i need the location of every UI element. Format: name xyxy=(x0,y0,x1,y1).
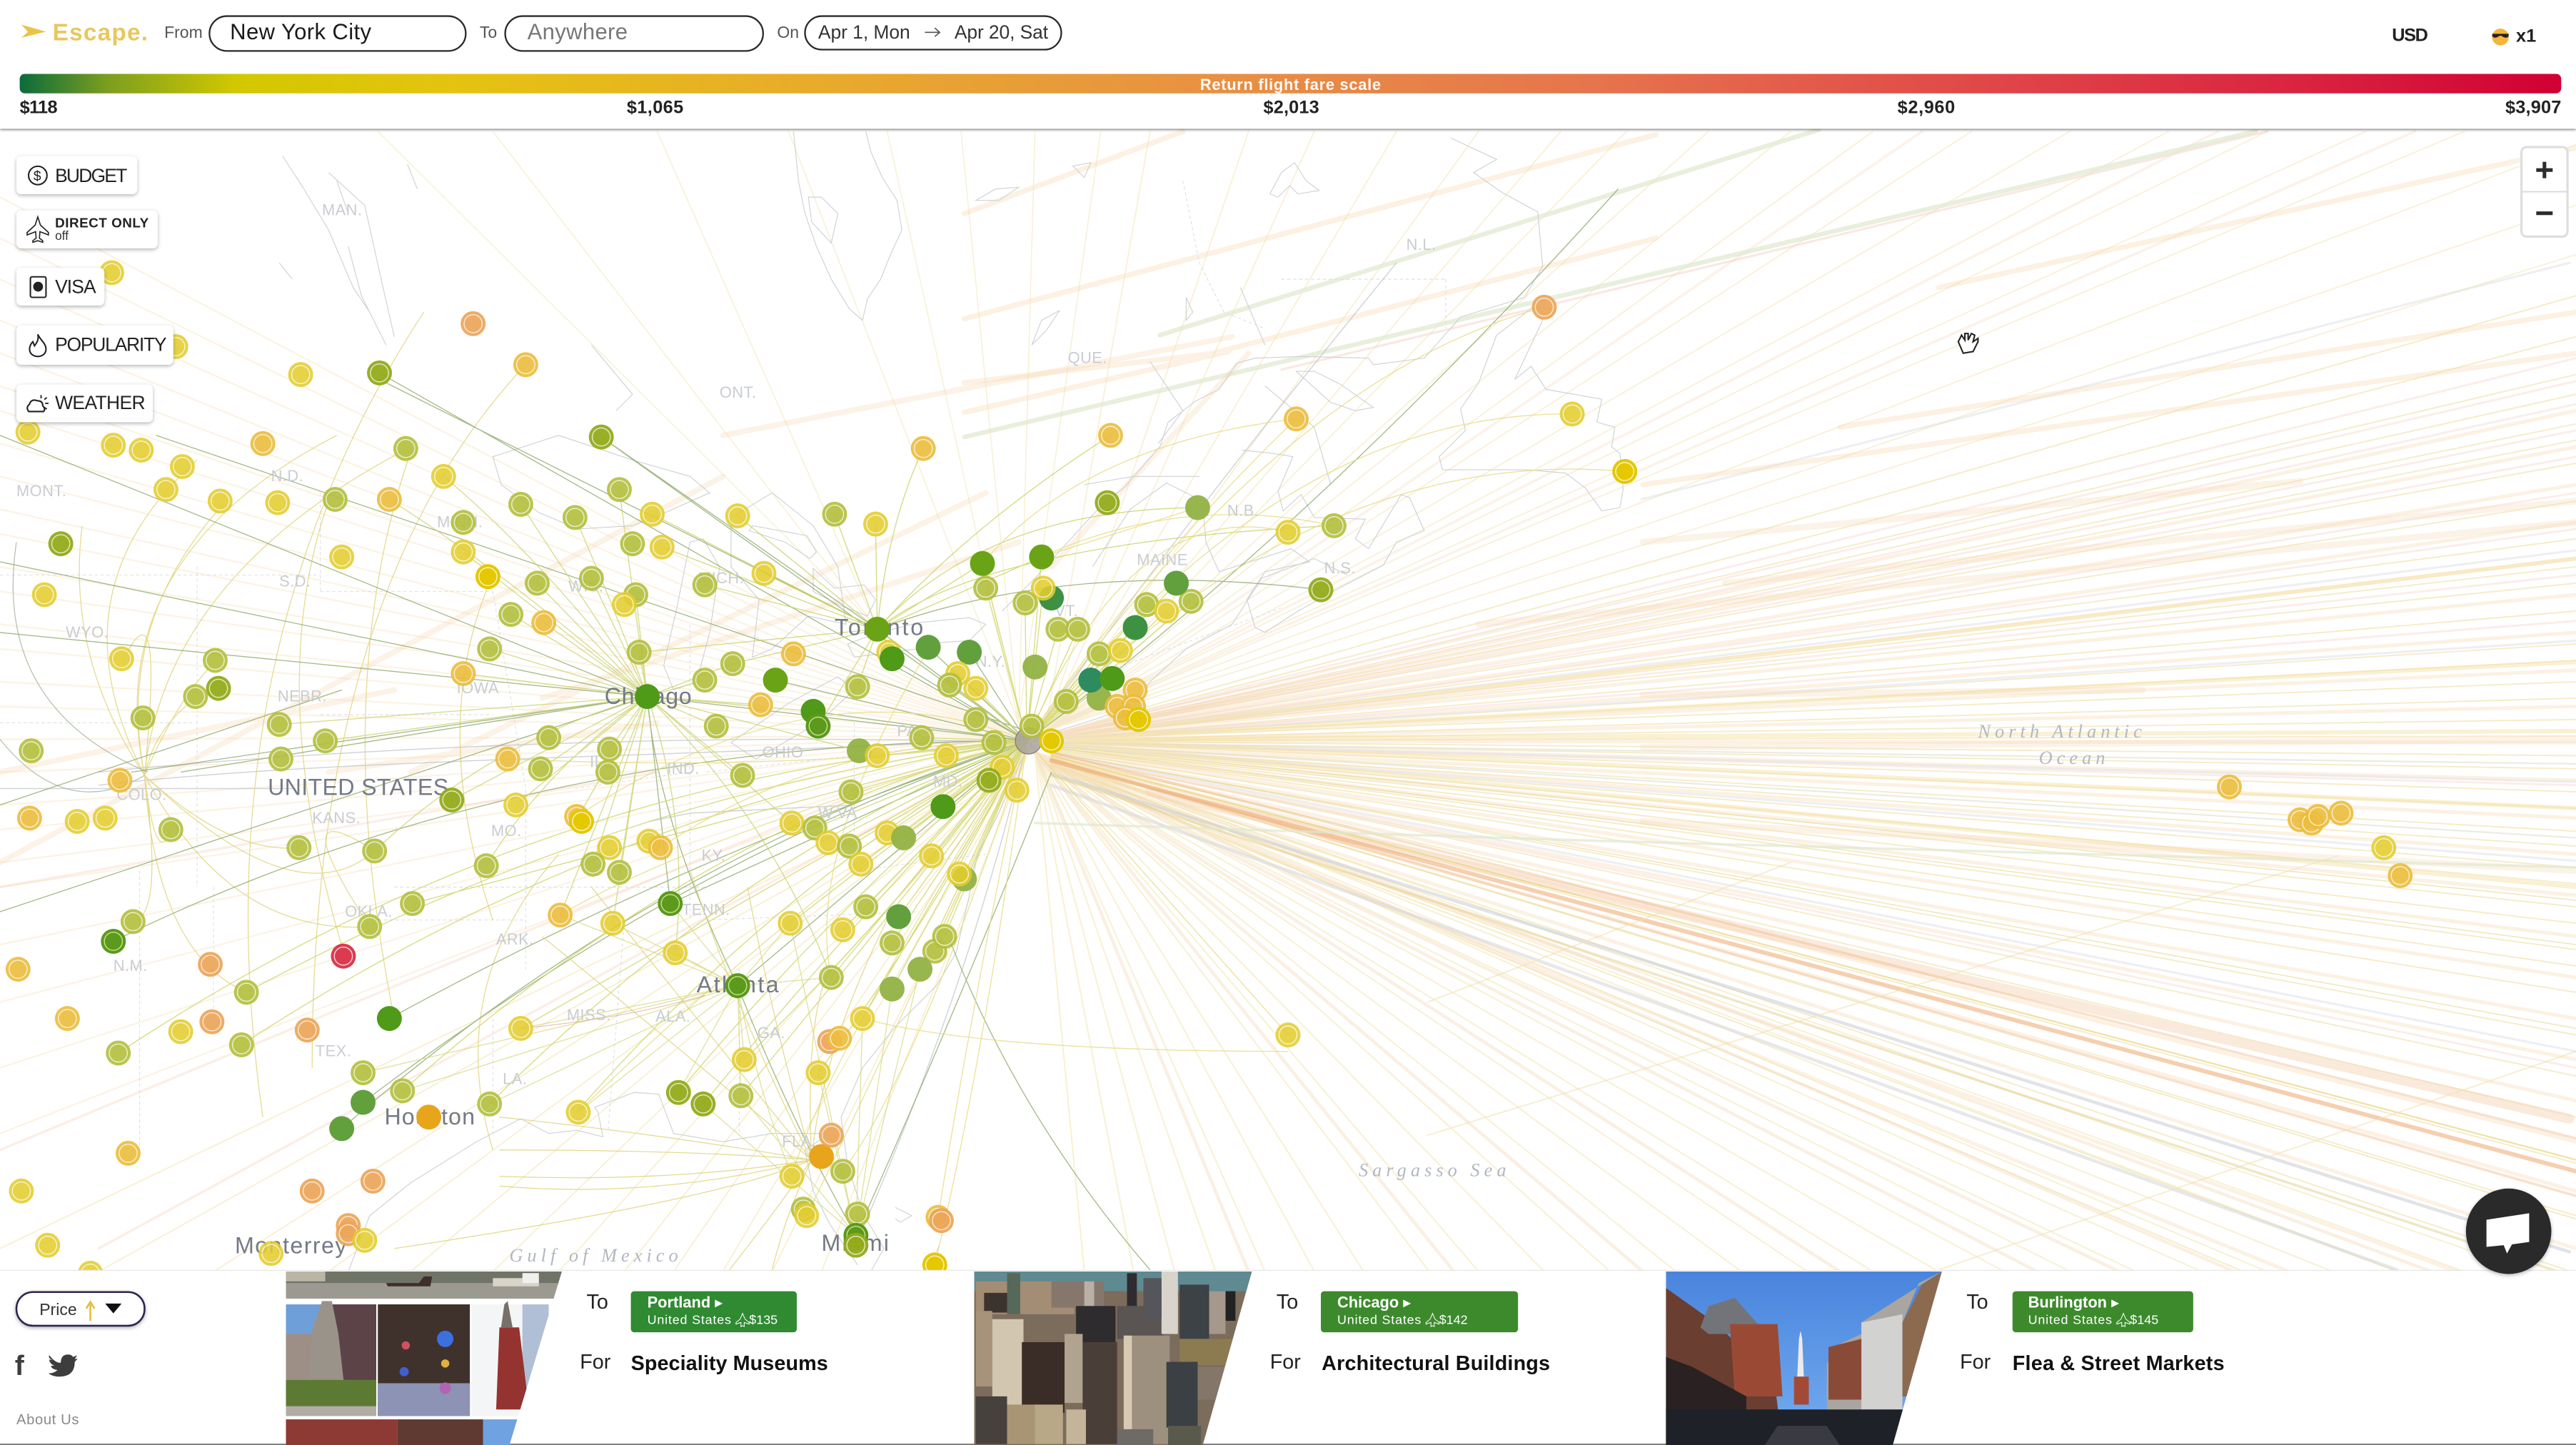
card: Chicago: Architectural Buildings xyxy=(1322,1352,1550,1375)
card: Burlington: Flea & Street Markets xyxy=(2013,1352,2225,1375)
date field xyxy=(777,16,1061,50)
currency: USD xyxy=(2392,26,2428,46)
state, province and sea labels: PA. xyxy=(897,722,922,740)
state, province and sea labels: MICH. xyxy=(698,569,744,587)
state, province and sea labels: LA. xyxy=(503,1070,527,1088)
filter button: budget: $ xyxy=(34,168,41,184)
state, province and sea labels: N.L. xyxy=(1407,236,1437,253)
state, province and sea labels: MD. xyxy=(933,772,962,790)
filter button: visa xyxy=(16,268,104,306)
origin marker: New York City xyxy=(1015,727,1042,754)
icon: hand cursor xyxy=(1958,333,1978,353)
to field: Anywhere xyxy=(528,19,628,44)
state, province and sea labels: QUE. xyxy=(1068,349,1107,367)
state, province and sea labels: N.M. xyxy=(114,957,148,975)
from field xyxy=(164,16,466,51)
state, province and sea labels: MAN. xyxy=(322,201,362,218)
state, province and sea labels: N.B. xyxy=(1227,502,1259,520)
from field: From xyxy=(164,23,203,41)
zoom control xyxy=(2522,147,2567,236)
card: Portland: To xyxy=(586,1291,608,1314)
state borders xyxy=(0,181,1446,1150)
destination tag: Chicago: Chicago ▸ xyxy=(1337,1294,1411,1311)
state, province and sea labels: N.Y. xyxy=(976,653,1005,670)
state, province and sea labels: NEBR. xyxy=(278,688,327,705)
card: Burlington: For xyxy=(1960,1351,1991,1374)
state, province and sea labels: Sargasso Sea xyxy=(1359,1159,1511,1181)
card: Portland: Speciality Museums xyxy=(631,1352,828,1375)
long grey routes xyxy=(0,263,1397,1240)
photo: Portland collage xyxy=(286,1272,565,1445)
filter button: direct only: DIRECT ONLY xyxy=(55,216,149,231)
card: Burlington xyxy=(1666,1272,2225,1445)
state, province and sea labels: WIS. xyxy=(568,577,603,595)
card: Portland xyxy=(286,1272,828,1445)
state, province and sea labels: GA. xyxy=(758,1024,785,1042)
destination tag: Portland: Portland ▸ xyxy=(648,1294,723,1311)
filter button: weather xyxy=(16,384,153,422)
date field: Apr 20, Sat xyxy=(955,21,1049,43)
filter button: visa: VISA xyxy=(55,276,96,298)
photo: Chicago skyline xyxy=(975,1272,1254,1445)
card: Chicago: To xyxy=(1277,1291,1298,1314)
state, province and sea labels: COLO. xyxy=(116,786,167,804)
destination price markers xyxy=(6,260,2413,1286)
header bar xyxy=(0,0,2576,129)
destination tag: Burlington: United States xyxy=(2028,1313,2112,1327)
state, province and sea labels: MINN. xyxy=(437,513,483,531)
fare scale bar: $2,013 xyxy=(1263,97,1319,117)
state, province and sea labels: KANS. xyxy=(312,809,361,827)
date field: On xyxy=(777,23,799,41)
state, province and sea labels: N.S. xyxy=(1324,559,1356,577)
city labels: Houston xyxy=(384,1104,475,1129)
city labels: Chicago xyxy=(605,683,692,709)
date field: Apr 1, Mon xyxy=(818,21,910,43)
state, province and sea labels: ILL. xyxy=(590,753,617,771)
state, province and sea labels: North Atlantic xyxy=(1977,720,2146,742)
about link: About Us xyxy=(16,1412,79,1428)
icon: zoom in xyxy=(2536,162,2552,178)
state, province and sea labels: TEX. xyxy=(316,1042,351,1060)
state, province and sea labels: Ocean xyxy=(2039,747,2110,768)
destination tag: Chicago: United States xyxy=(1337,1313,1421,1327)
state, province and sea labels: S.D. xyxy=(279,572,311,590)
to field xyxy=(480,16,763,51)
state, province and sea labels: IOWA xyxy=(457,679,499,697)
destination tag: Chicago xyxy=(1321,1292,1518,1332)
destination tag: Burlington: Burlington ▸ xyxy=(2028,1294,2119,1311)
filter button: weather: WEATHER xyxy=(55,392,146,413)
state, province and sea labels: OHIO xyxy=(763,743,803,761)
sort button xyxy=(16,1292,144,1326)
filter button: budget xyxy=(16,156,137,194)
state, province and sea labels: IND. xyxy=(667,760,700,777)
icon: twitter xyxy=(49,1354,78,1376)
state, province and sea labels: TENN. xyxy=(682,901,730,919)
state, province and sea labels: MONT. xyxy=(16,482,66,500)
city labels: Miami xyxy=(822,1230,889,1256)
logo: Escape. xyxy=(53,19,148,46)
fare scale bar: $3,907 xyxy=(2505,97,2561,117)
state, province and sea labels: Gulf of Mexico xyxy=(509,1244,683,1266)
green and yellow flight routes xyxy=(0,189,1625,1270)
to field: To xyxy=(480,23,497,41)
card: Portland: For xyxy=(580,1351,611,1374)
city labels: Monterrey xyxy=(235,1233,347,1259)
state, province and sea labels: N.D. xyxy=(271,467,303,485)
filter button: direct only: off xyxy=(55,228,69,243)
card: Chicago xyxy=(975,1272,1550,1445)
state, province and sea labels: KY. xyxy=(702,847,725,865)
icon: sunglasses emoji multiplier: x1 xyxy=(2516,26,2536,46)
state, province and sea labels: MO. xyxy=(491,822,522,840)
card: Burlington: To xyxy=(1966,1291,1988,1314)
destination tag: Burlington xyxy=(2013,1292,2193,1332)
filter button: direct only xyxy=(16,211,158,248)
state, province and sea labels: MISS. xyxy=(567,1006,611,1024)
card: Chicago: For xyxy=(1270,1351,1301,1374)
photo: Burlington street xyxy=(1666,1272,1945,1445)
state, province and sea labels xyxy=(16,201,2146,1266)
sort button: Price xyxy=(39,1300,77,1319)
footer bar xyxy=(0,1270,2576,1445)
western arcs from Denver xyxy=(0,312,558,1150)
state, province and sea labels: ONT. xyxy=(720,383,756,401)
filter button: popularity xyxy=(16,326,173,365)
fare scale bar: $2,960 xyxy=(1898,97,1955,117)
city labels: Toronto xyxy=(835,614,923,640)
map coastlines and borders xyxy=(279,131,1623,1272)
state, province and sea labels: ARK. xyxy=(496,930,534,948)
city labels xyxy=(235,614,923,1259)
state, province and sea labels: ALA. xyxy=(655,1007,690,1025)
icon: facebook: f xyxy=(15,1351,25,1381)
state, province and sea labels: VT. xyxy=(1055,602,1078,620)
chat button xyxy=(2466,1189,2551,1274)
destination tag: Portland: United States xyxy=(648,1313,731,1327)
destination tag: Burlington: $145 xyxy=(2130,1313,2158,1327)
state, province and sea labels: WYO. xyxy=(66,623,109,641)
icon: zoom out xyxy=(2536,213,2552,214)
from field: New York City xyxy=(230,19,371,44)
fare scale bar: $118 xyxy=(20,97,58,117)
fare scale bar xyxy=(20,74,2561,117)
destination tag: Portland: $135 xyxy=(749,1313,778,1327)
state, province and sea labels: FLA. xyxy=(782,1132,816,1150)
state, province and sea labels: MAINE xyxy=(1137,551,1188,569)
state, province and sea labels: W.VA. xyxy=(818,804,862,822)
filter button: budget: BUDGET xyxy=(55,165,127,186)
destination tag: Portland xyxy=(631,1292,797,1332)
fare scale bar: $1,065 xyxy=(627,97,683,117)
city labels: UNITED STATES xyxy=(268,775,448,800)
fare scale bar: Return flight fare scale xyxy=(1200,76,1381,94)
city labels: Atlanta xyxy=(697,972,779,997)
icon: sunglasses emoji multiplier xyxy=(2492,26,2536,46)
destination tag: Chicago: $142 xyxy=(1439,1313,1468,1327)
state, province and sea labels: OKLA. xyxy=(345,902,393,920)
filter button: popularity: POPULARITY xyxy=(55,333,167,355)
